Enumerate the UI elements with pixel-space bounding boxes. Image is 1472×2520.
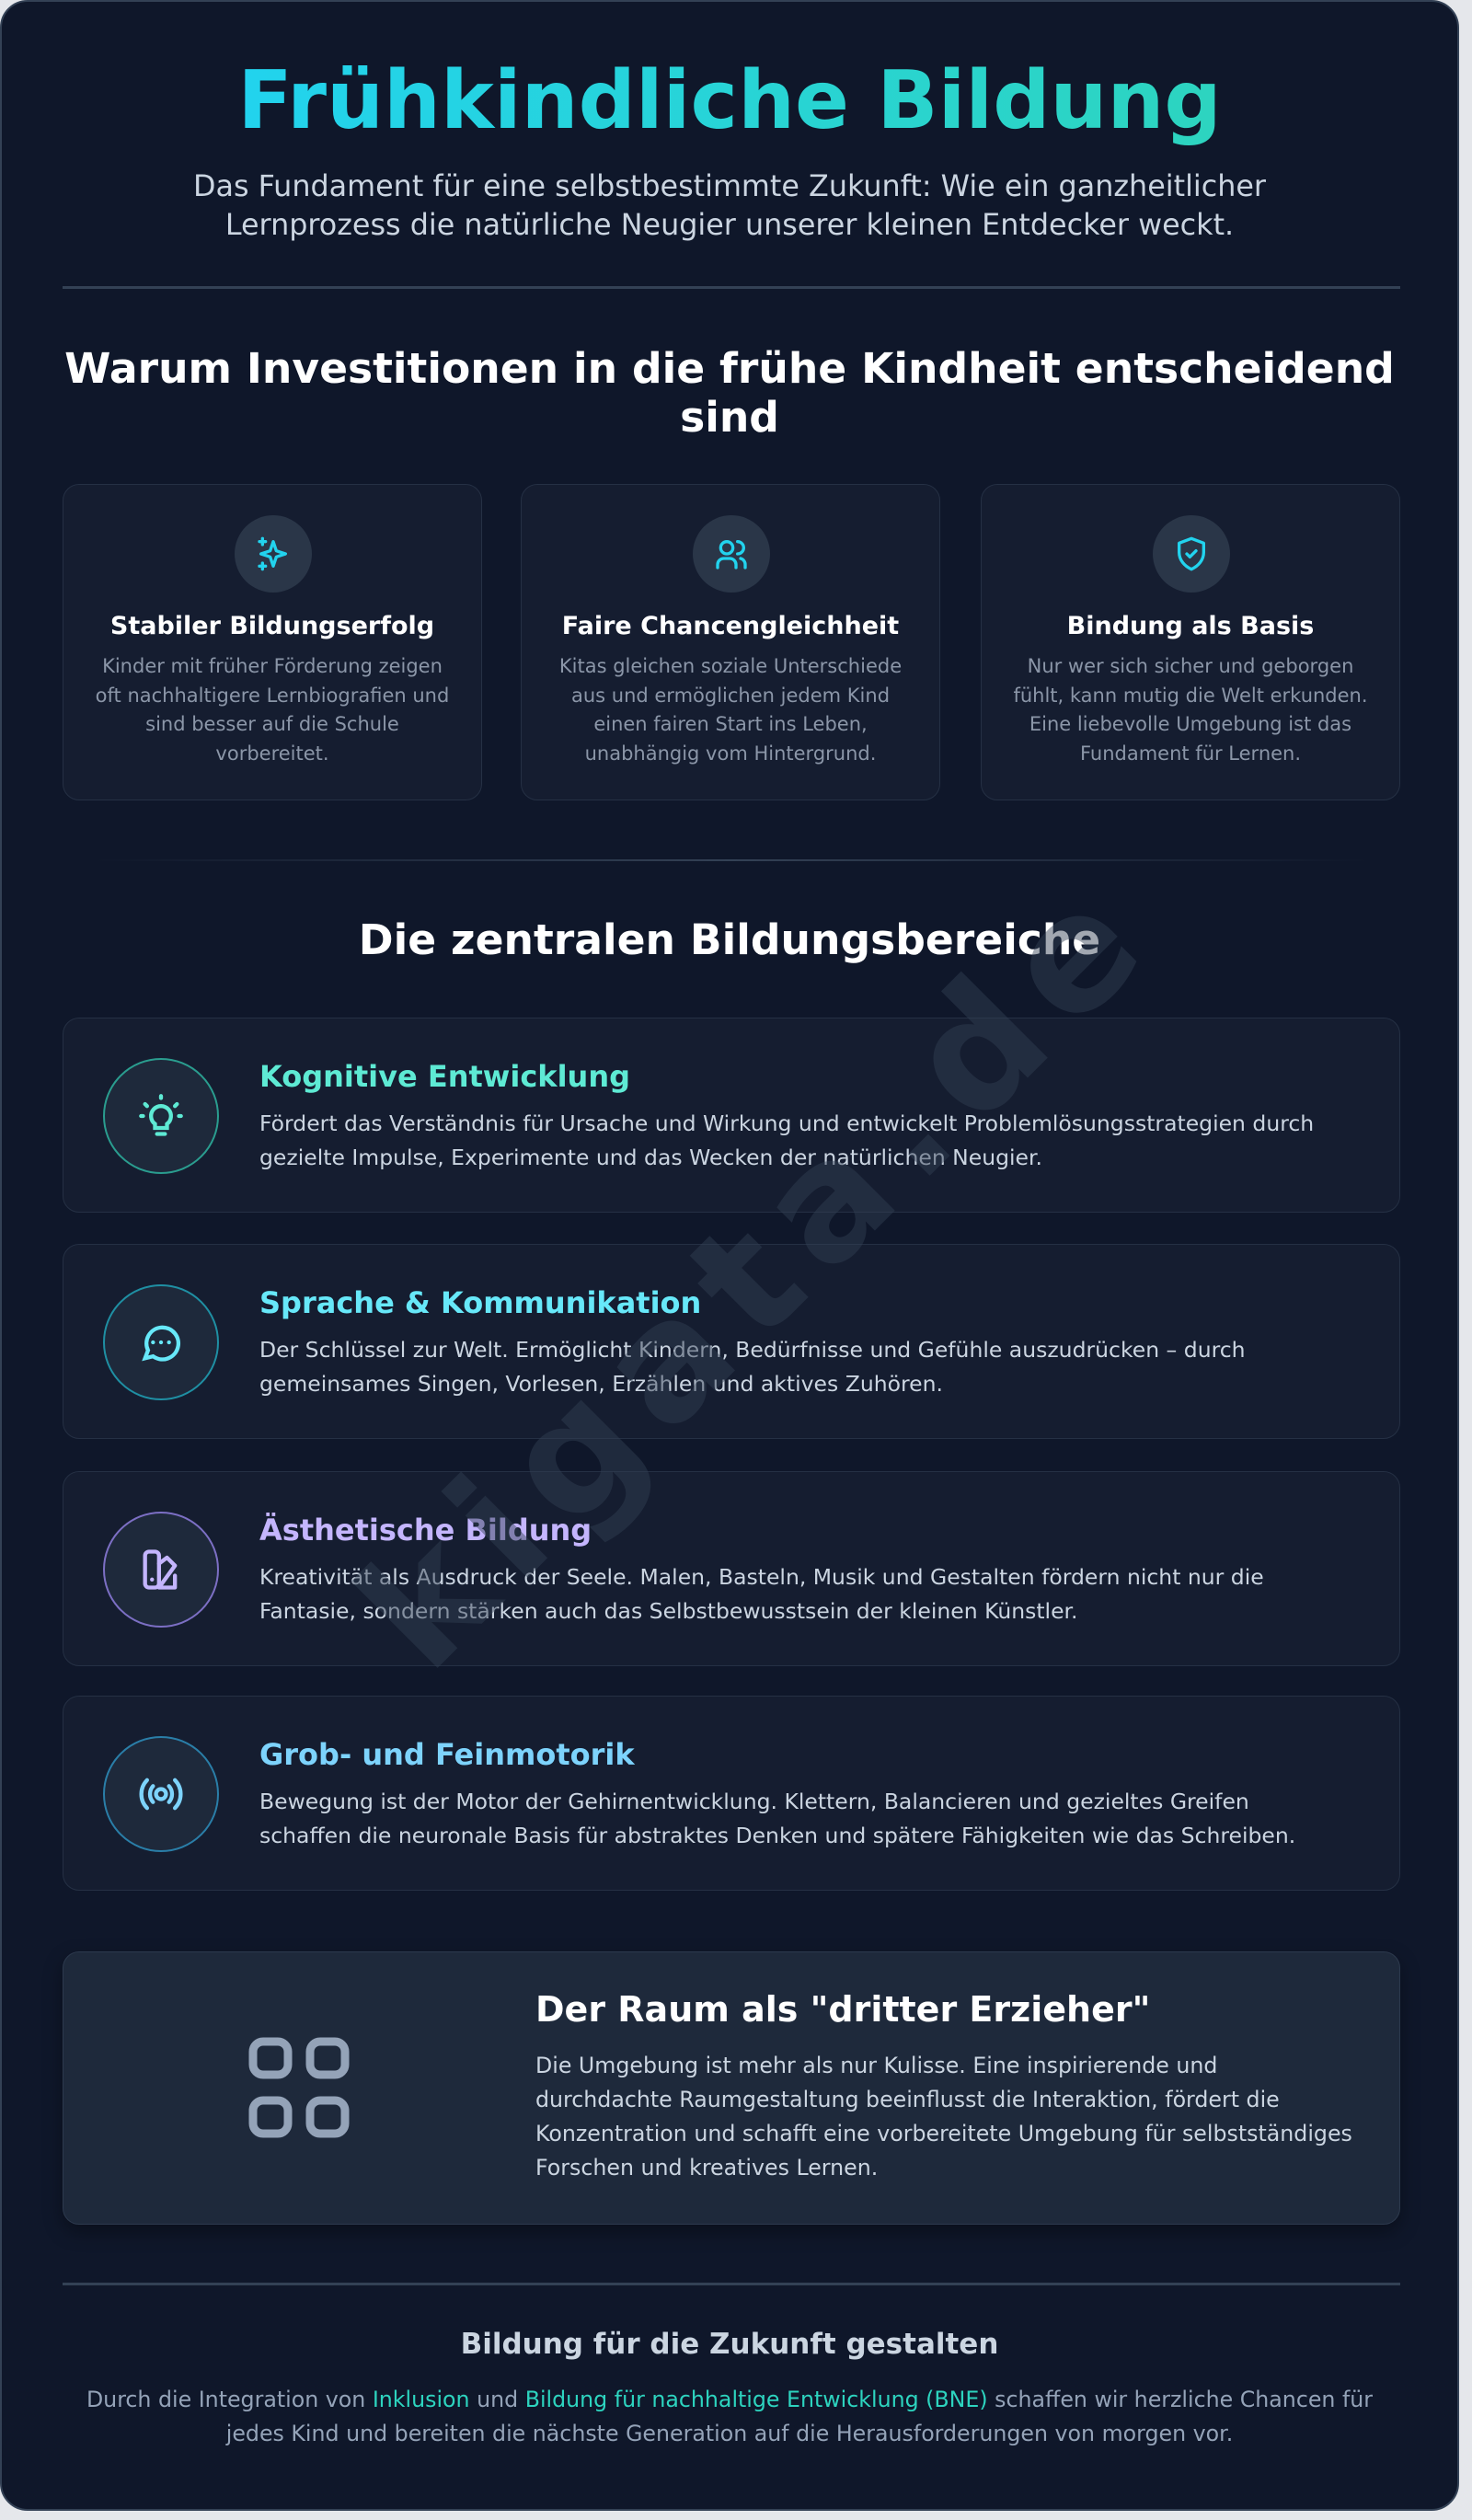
area: Ästhetische Bildung: Kreativität als Ausdruck der Seele. Malen, Basteln, Musik und Gestalten fördern nicht nur die Fantasie, sondern stärken auch das Selbstbewusstsein der kleinen Künstler. xyxy=(259,1564,1264,1624)
card: Faire Chancengleichheit: Kitas gleichen soziale Unterschiede aus und ermöglichen jedem Kind einen fairen Start ins Leben, unabhängig vom Hintergrund. xyxy=(559,655,902,764)
icon: radio waves xyxy=(103,1736,219,1852)
area: Sprache xyxy=(63,1244,1400,1439)
card: Stabiler Bildungserfolg: Kinder mit früher Förderung zeigen oft nachhaltigere Lernbiografien und sind besser auf die Schule vorbereitet. xyxy=(96,655,449,764)
text: durchdachte Raumgestaltung beeinflusst die Interaktion, fördert die Konzentration und schafft eine vorbereitete Umgebung für selbstständiges Forschen und kreatives Lernen. xyxy=(535,2087,1352,2181)
card: Bindung als Basis: Bindung als Basis xyxy=(1067,612,1314,640)
card: Faire Chancengleichheit: Faire Chancengleichheit xyxy=(562,612,899,640)
area: Kognitive Entwicklung: Fördert das Verständnis für Ursache und Wirkung und entwickelt Problemlösungsstrategien durch gezielte Impulse, Experimente und das Wecken der natürlichen Neugier. xyxy=(259,1110,1314,1170)
footer heading: Bildung für die Zukunft gestalten xyxy=(461,2328,998,2361)
area: Motorik: Grob- und Feinmotorik xyxy=(259,1737,635,1772)
icon: grid xyxy=(248,2037,350,2138)
heading: Der Raum als "dritter Erzieher" xyxy=(535,1989,1150,2030)
watermark: kigata.de xyxy=(323,837,1190,1705)
area: Motorik xyxy=(63,1696,1400,1891)
icon: chat xyxy=(103,1284,219,1400)
card: Stabiler Bildungserfolg xyxy=(63,484,482,800)
text: Die Umgebung ist mehr als nur Kulisse. Eine inspirierende und xyxy=(535,2053,1217,2078)
icon: sparkles xyxy=(235,515,312,593)
area: Sprache: Sprache & Kommunikation xyxy=(259,1285,701,1320)
area: Motorik: Bewegung ist der Motor der Gehirnentwicklung. Klettern, Balancieren und gezieltes Greifen schaffen die neuronale Basis für abstraktes Denken und spätere Fähigkeiten wie das Schreiben. xyxy=(259,1789,1295,1848)
card: Bindung als Basis: Nur wer sich sicher und geborgen fühlt, kann mutig die Welt erkunden. Eine liebevolle Umgebung ist das Fundament für Lernen. xyxy=(1013,655,1368,764)
footer text: Durch die Integration von Inklusion und Bildung für nachhaltige Entwicklung (BNE) schaffen wir herzliche Chancen für jedes Kind und bereiten die nächste Generation auf die Herausforderungen von morgen vor. xyxy=(86,2387,1373,2446)
icon: palette xyxy=(103,1512,219,1628)
subtitle: Das Fundament für eine selbstbestimmte Zukunft: Wie ein ganzheitlicher Lernprozess die natürliche Neugier unserer kleinen Entdecker weckt. xyxy=(193,169,1266,242)
card: Faire Chancengleichheit xyxy=(521,484,940,800)
heading: areas: Die zentralen Bildungsbereiche xyxy=(359,915,1100,964)
area: Kognitive Entwicklung: Kognitive Entwicklung xyxy=(259,1059,630,1094)
panel: Raum als dritter Erzieher xyxy=(63,1951,1400,2225)
area: Kognitive Entwicklung xyxy=(63,1018,1400,1213)
card: Stabiler Bildungserfolg: Stabiler Bildungserfolg xyxy=(110,612,434,640)
area: Ästhetische Bildung: Ästhetische Bildung xyxy=(259,1513,592,1548)
icon: shield xyxy=(1153,515,1230,593)
title: Frühkindliche Bildung xyxy=(237,53,1222,147)
card: Bindung als Basis xyxy=(981,484,1400,800)
heading: why invest: Warum Investitionen in die frühe Kindheit entscheidend sind xyxy=(64,344,1395,442)
icon: users xyxy=(693,515,770,593)
area: Ästhetische Bildung xyxy=(63,1471,1400,1666)
area: Sprache: Der Schlüssel zur Welt. Ermöglicht Kindern, Bedürfnisse und Gefühle auszudrücken – durch gemeinsames Singen, Vorlesen, Erzählen und aktives Zuhören. xyxy=(259,1337,1246,1397)
icon: bulb xyxy=(103,1058,219,1174)
